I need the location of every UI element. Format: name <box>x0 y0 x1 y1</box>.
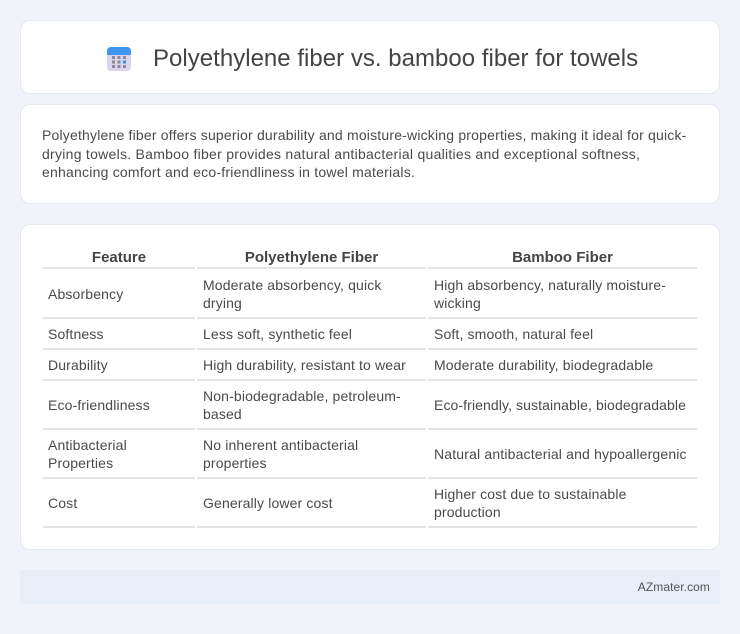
column headers: Feature <box>92 249 146 266</box>
header card <box>20 20 720 94</box>
row: antibacterial properties: properties <box>203 455 267 471</box>
comparison table card <box>20 224 720 550</box>
row: softness <box>48 326 593 342</box>
row: absorbency <box>48 277 666 311</box>
column headers: Bamboo Fiber <box>512 249 613 266</box>
row: eco-friendliness: Eco-friendly, sustainable, biodegradable <box>434 397 686 413</box>
row: cost: Generally lower cost <box>203 495 333 511</box>
row: cost: Higher cost due to sustainable <box>434 486 627 502</box>
row: softness: Soft, smooth, natural feel <box>434 326 593 342</box>
row: antibacterial properties: Properties <box>48 455 113 471</box>
summary card <box>20 104 720 204</box>
row: antibacterial properties: Antibacterial <box>48 437 127 453</box>
row: eco-friendliness: based <box>203 406 242 422</box>
row: softness: Softness <box>48 326 104 342</box>
row: softness: Less soft, synthetic feel <box>203 326 352 342</box>
row: absorbency: Absorbency <box>48 286 123 302</box>
row: antibacterial properties <box>48 437 687 471</box>
row: antibacterial properties: No inherent antibacterial <box>203 437 358 453</box>
summary text <box>42 127 687 180</box>
row: cost: Cost <box>48 495 77 511</box>
footer source text: AZmater.com <box>638 580 710 594</box>
row: cost <box>48 486 627 520</box>
column headers: Polyethylene Fiber <box>245 249 378 266</box>
row: absorbency: High absorbency, naturally moisture- <box>434 277 666 293</box>
row: cost: production <box>434 504 501 520</box>
footer bar <box>20 570 720 604</box>
row: absorbency: drying <box>203 295 242 311</box>
row: durability: High durability, resistant to wear <box>203 357 406 373</box>
row: durability: Moderate durability, biodegradable <box>434 357 653 373</box>
row: eco-friendliness: Non-biodegradable, petroleum- <box>203 388 401 404</box>
row: absorbency: wicking <box>434 295 481 311</box>
row: eco-friendliness: Eco-friendliness <box>48 397 150 413</box>
column headers <box>92 249 613 266</box>
icon: calendar <box>107 47 131 71</box>
row: durability <box>48 357 653 373</box>
row: durability: Durability <box>48 357 108 373</box>
row: absorbency: Moderate absorbency, quick <box>203 277 381 293</box>
summary text: drying towels. Bamboo fiber provides natural antibacterial qualities and exceptional softness, <box>42 146 640 162</box>
summary text: enhancing comfort and eco-friendliness in towel materials. <box>42 164 415 180</box>
summary text: Polyethylene fiber offers superior durability and moisture-wicking properties, making it ideal for quick- <box>42 127 687 143</box>
row: antibacterial properties: Natural antibacterial and hypoallergenic <box>434 446 687 462</box>
title: Polyethylene fiber vs. bamboo fiber for towels <box>153 45 638 72</box>
row: eco-friendliness <box>48 388 686 422</box>
